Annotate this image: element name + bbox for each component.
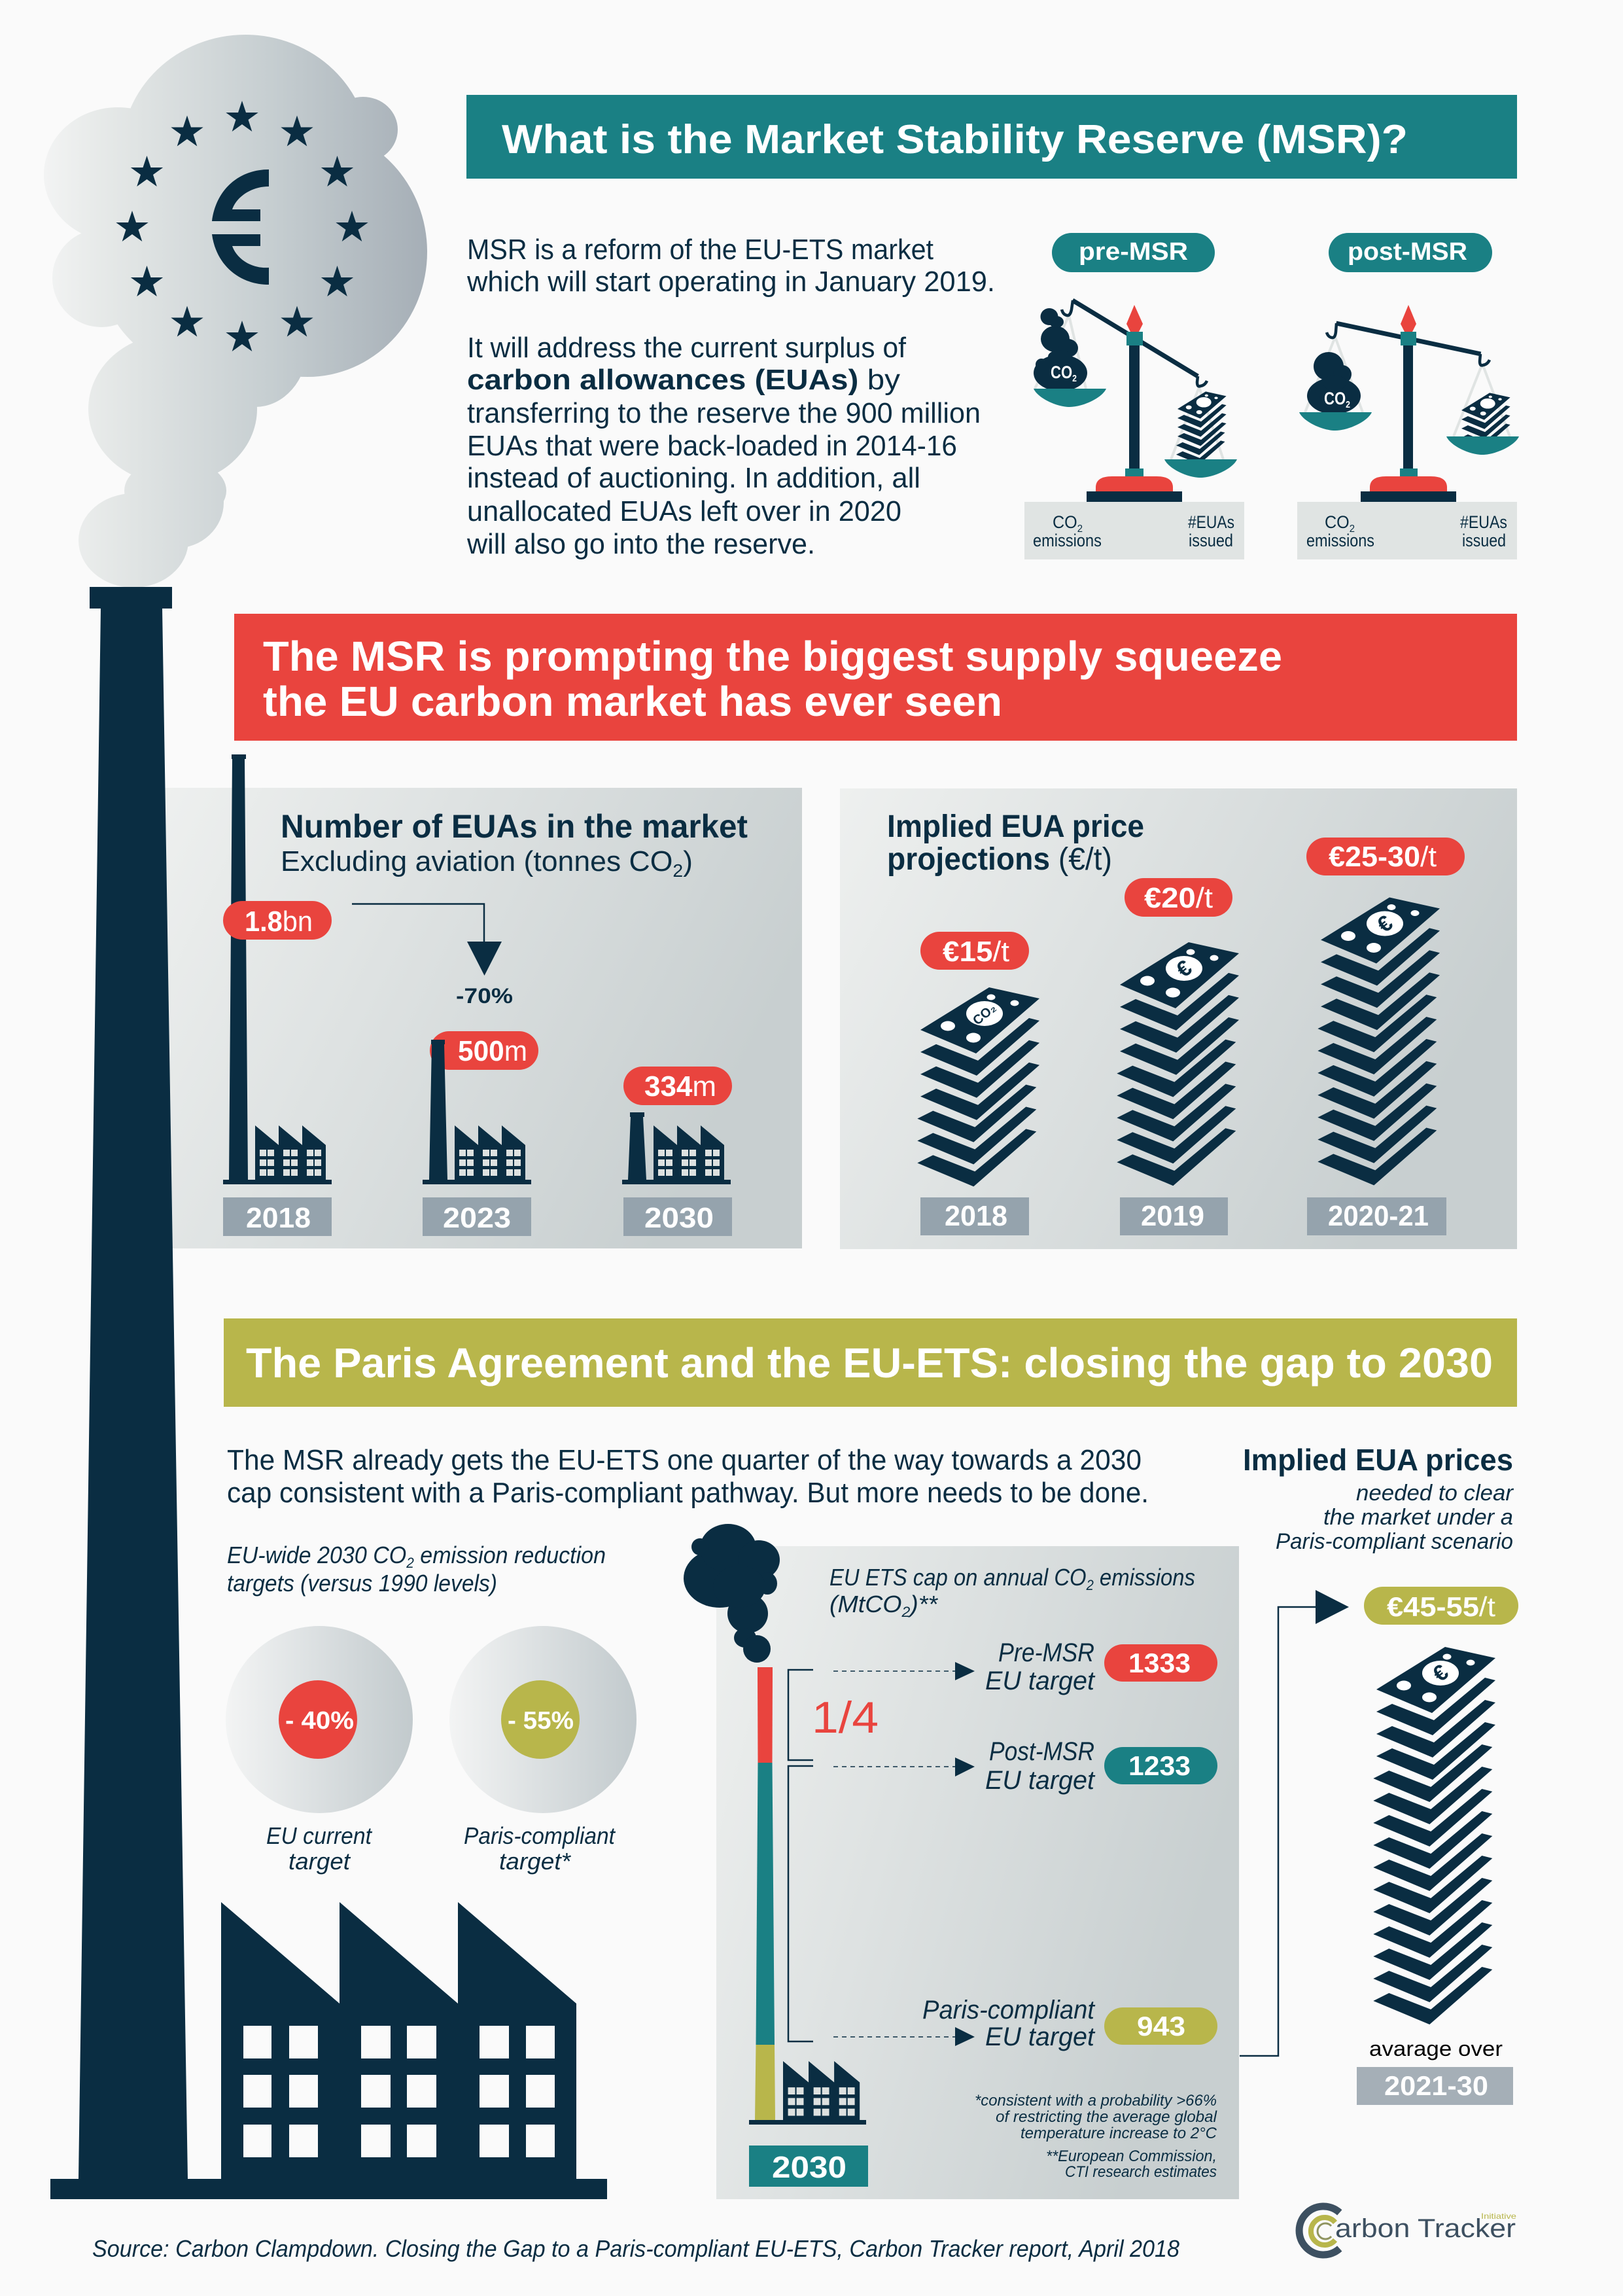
- text block: emission reduction targets: emission reduction: [414, 1542, 606, 1568]
- text block: implied EUA prices: needed to clear: [1356, 1481, 1514, 1506]
- title banner: what is the MSR: [466, 95, 1517, 179]
- main chimney and factory: [50, 587, 607, 2199]
- icon: post-MSR balance scale: 2: [1346, 399, 1350, 410]
- label: post-MSR target: [985, 1737, 1096, 1795]
- chart: Paris-compliant target 55 percent: Paris-compliant: [464, 1822, 616, 1849]
- panel subheading: excluding aviation: Excluding aviation (tonnes CO: [281, 845, 668, 877]
- footnotes: of restricting the average global: [996, 2108, 1217, 2126]
- bracket: post MSR to Paris: [788, 1766, 813, 2041]
- year label: 2018: [920, 1197, 1029, 1235]
- pill: pre-MSR: [1052, 233, 1215, 272]
- chart: EU current target 40 percent: - 40%: [285, 1707, 354, 1735]
- title banner: what is the MSR: What is the Market Stability Reserve (MSR)?: [502, 117, 1408, 162]
- text block: MSR explanation: unallocated EUAs left over in 2020: [467, 495, 901, 527]
- year label: 2018: 2018: [945, 1200, 1007, 1232]
- panel: EU ETS cap chart: [684, 1524, 1239, 2199]
- icon: pre-MSR balance scale: [1024, 300, 1244, 559]
- icon: post-MSR balance scale: issued: [1462, 531, 1506, 550]
- text block: MSR explanation: [466, 234, 995, 560]
- logo: Carbon Tracker: arbon Tracker: [1335, 2214, 1516, 2243]
- year label: 2030: [749, 2146, 868, 2187]
- text block: MSR explanation: carbon allowances (EUAs) by: [467, 364, 900, 396]
- icon: banknote stack 2018: CO₂: [970, 1000, 999, 1028]
- pill: 334m: 334m: [644, 1070, 716, 1103]
- icon: banknote stack 2021-30: €: [1428, 1659, 1453, 1687]
- arrow: to implied price: [1240, 1590, 1349, 2056]
- chart heading: EU ETS cap: (MtCO: [829, 1591, 899, 1617]
- year label: 2019: 2019: [1141, 1200, 1204, 1232]
- smoke cloud with EU stars: [44, 35, 427, 588]
- pill: 45-55 euro per tonne: €45-55/t: [1387, 1591, 1495, 1622]
- label: average over: avarage over: [1369, 2037, 1503, 2060]
- icon: pre-MSR balance scale: 2: [1077, 523, 1083, 535]
- logo: Carbon Tracker: [1299, 2206, 1516, 2255]
- text block: emission reduction targets: EU-wide 2030 CO: [227, 1542, 417, 1568]
- pill: 25-30 euro per tonne: [1306, 838, 1465, 875]
- panel: number of EUAs in the market: [160, 754, 802, 1248]
- icon: ring of stars: [116, 101, 368, 351]
- year label: 2019: [1120, 1197, 1228, 1235]
- banner: Paris Agreement and EU-ETS: The Paris Agreement and the EU-ETS: closing the gap to 2030: [246, 1339, 1493, 1386]
- chart: Paris-compliant target 55 percent: target*: [499, 1848, 571, 1875]
- pill: 45-55 euro per tonne: [1364, 1587, 1518, 1625]
- label: one quarter: 1/4: [812, 1693, 879, 1742]
- pill: 1333: 1333: [1128, 1648, 1191, 1678]
- banner: biggest supply squeeze: [234, 614, 1517, 741]
- icon: post-MSR balance scale: CO: [1325, 512, 1352, 532]
- chart: EU current target 40 percent: EU current: [266, 1822, 373, 1849]
- bar: 2023 chimney and factory: [423, 1040, 531, 1184]
- year label: 2023: [423, 1197, 531, 1236]
- pill: 500m: 500m: [458, 1035, 527, 1067]
- pill: 15 euro per tonne: [920, 932, 1029, 970]
- banner: Paris Agreement and EU-ETS: [224, 1318, 1517, 1407]
- text block: emission reduction targets: [227, 1542, 606, 1597]
- pill: 1.8bn: 1.8bn: [245, 906, 313, 938]
- icon: pre-MSR balance scale: CO: [1053, 512, 1079, 532]
- icon: euro sign: [212, 169, 269, 285]
- pill: 1333: [1104, 1644, 1217, 1682]
- year label: 2020-21: [1307, 1197, 1446, 1235]
- chart heading: EU ETS cap: 2: [901, 1604, 910, 1620]
- text block: MSR explanation: MSR is a reform of the EU-ETS market: [467, 234, 934, 266]
- pill: 334m: [623, 1067, 732, 1105]
- icon: banknote stack 2021-30: [1373, 1647, 1495, 2024]
- icon: post-MSR balance scale: [1297, 305, 1519, 559]
- text block: implied EUA prices: [1243, 1443, 1514, 1554]
- banner: biggest supply squeeze: The MSR is prompting the biggest supply squeeze: [263, 633, 1282, 680]
- footnotes: CTI research estimates: [1065, 2163, 1217, 2181]
- pill: 1.8bn: [223, 901, 332, 940]
- text block: implied EUA prices: Implied EUA prices: [1243, 1443, 1513, 1477]
- text block: MSR explanation: transferring to the reserve the 900 million: [467, 397, 981, 429]
- label: post-MSR target: Post-MSR: [989, 1737, 1094, 1766]
- year label: 2018: [223, 1197, 332, 1236]
- footnotes: [975, 2092, 1217, 2181]
- bracket: pre to post MSR: [788, 1670, 813, 1760]
- year label: 2030: 2030: [772, 2150, 846, 2184]
- icon: dark smoke: [684, 1524, 780, 1663]
- chart: Paris-compliant target 55 percent: - 55%: [508, 1707, 574, 1735]
- year label: 2018: 2018: [246, 1202, 311, 1234]
- year label: 2023: 2023: [443, 1202, 511, 1234]
- chart: EU current target 40 percent: target: [288, 1848, 351, 1875]
- banner: biggest supply squeeze: the EU carbon market has ever seen: [263, 678, 1002, 725]
- text block: one quarter of the way: [227, 1444, 1149, 1509]
- arrow: pre-MSR: [833, 1662, 975, 1680]
- text block: implied EUA prices: Paris-compliant scenario: [1276, 1529, 1513, 1554]
- footnotes: *consistent with a probability >66%: [975, 2092, 1217, 2110]
- icon: post-MSR balance scale: CO: [1324, 389, 1350, 408]
- arrow: minus 70 percent: [352, 904, 502, 976]
- text block: emission reduction targets: 2: [406, 1555, 414, 1571]
- icon: post-MSR balance scale: #EUAs: [1460, 512, 1507, 532]
- label: pre-MSR target: EU target: [985, 1667, 1096, 1695]
- year label: 2030: 2030: [644, 1202, 714, 1234]
- label: pre-MSR target: [985, 1638, 1096, 1695]
- chart: Paris-compliant target 55 percent: [449, 1626, 637, 1875]
- chart heading: EU ETS cap: )**: [907, 1591, 938, 1617]
- chart heading: EU ETS cap: 2: [1086, 1577, 1094, 1593]
- text block: one quarter of the way: cap consistent with a Paris-compliant pathway. But more needs to be done.: [227, 1477, 1149, 1509]
- text block: emission reduction targets: targets (versus 1990 levels): [227, 1570, 497, 1597]
- pill: 943: 943: [1137, 2011, 1185, 2041]
- icon: banknote stack 2019: €: [1172, 955, 1196, 983]
- pill: 25-30 euro per tonne: €25-30/t: [1329, 841, 1437, 873]
- label: Paris-compliant target: [922, 1996, 1096, 2051]
- icon: post-MSR balance scale: emissions: [1306, 531, 1374, 550]
- text block: implied EUA prices: the market under a: [1323, 1505, 1513, 1530]
- pill: 15 euro per tonne: €15/t: [943, 936, 1009, 968]
- text block: one quarter of the way: The MSR already gets the EU-ETS one quarter of the way towards a 2030: [227, 1444, 1142, 1476]
- panel heading: implied EUA price: Implied EUA price: [887, 809, 1144, 844]
- pill: 500m: [430, 1031, 538, 1070]
- pill: 20 euro per tonne: [1125, 878, 1232, 917]
- year label: 2021-30: [1357, 2067, 1513, 2105]
- icon: pre-MSR balance scale: emissions: [1033, 531, 1102, 550]
- label: Paris-compliant target: EU target: [985, 2022, 1096, 2051]
- chart heading: EU ETS cap: EU ETS cap on annual CO: [829, 1564, 1111, 1591]
- pill: 943: [1104, 2007, 1217, 2045]
- chart heading: EU ETS cap: [829, 1564, 1195, 1620]
- panel subheading: excluding aviation: ): [683, 845, 693, 877]
- icon: banknote stack 2019: [1117, 942, 1239, 1186]
- label: Paris-compliant target: Paris-compliant: [922, 1996, 1096, 2024]
- logo: Carbon Tracker: Initiative: [1481, 2212, 1516, 2221]
- year label: 2021-30: 2021-30: [1384, 2070, 1488, 2101]
- text block: MSR explanation: will also go into the reserve.: [466, 528, 815, 560]
- arrow: post-MSR: [833, 1757, 975, 1776]
- label: -70%: -70%: [456, 984, 513, 1008]
- year label: 2030: [623, 1197, 732, 1236]
- panel heading: number of EUAs: Number of EUAs in the market: [281, 808, 748, 845]
- pill: 1233: 1233: [1128, 1750, 1191, 1781]
- label: pre-MSR target: Pre-MSR: [998, 1638, 1094, 1667]
- arrow: Paris-compliant: [833, 2027, 975, 2046]
- label: post-MSR target: EU target: [985, 1766, 1096, 1795]
- pill: pre-MSR: pre-MSR: [1079, 238, 1188, 266]
- icon: banknote stack 2020-21: [1318, 898, 1440, 1186]
- text block: MSR explanation: which will start operating in January 2019.: [466, 266, 995, 298]
- icon: pre-MSR balance scale: CO: [1051, 362, 1077, 382]
- icon: banknote stack 2020-21: €: [1372, 910, 1397, 938]
- chart: EU current target 40 percent: [226, 1626, 413, 1875]
- icon: pre-MSR balance scale: #EUAs: [1188, 512, 1234, 532]
- icon: pre-MSR balance scale: 2: [1072, 373, 1077, 384]
- footnotes: temperature increase to 2°C: [1021, 2125, 1217, 2142]
- chart heading: EU ETS cap: emissions: [1094, 1564, 1195, 1591]
- panel: implied EUA price projections: [840, 788, 1517, 1249]
- pill: post-MSR: post-MSR: [1348, 238, 1467, 266]
- chart: segmented chimney: [749, 1667, 866, 2125]
- panel heading line 2: projections: projections (€/t): [887, 842, 1112, 877]
- pill: 1233: [1104, 1747, 1217, 1784]
- icon: banknote stack 2018: [917, 987, 1039, 1186]
- panel subheading: excluding aviation: 2: [672, 860, 683, 881]
- bar: 2030 chimney and factory: [622, 1112, 731, 1184]
- bar: 2018 chimney and factory: [223, 754, 332, 1184]
- text block: MSR explanation: instead of auctioning. In addition, all: [467, 462, 920, 494]
- text block: MSR explanation: EUAs that were back-loaded in 2014-16: [467, 430, 957, 462]
- icon: pre-MSR balance scale: issued: [1189, 531, 1233, 550]
- pill: post-MSR: [1329, 233, 1492, 272]
- pill: 20 euro per tonne: €20/t: [1144, 882, 1213, 914]
- source line: Source: Carbon Clampdown. Closing the Gap to a Paris-compliant EU-ETS, Carbon Tracker report, April 2018: [92, 2235, 1179, 2262]
- footnotes: **European Commission,: [1046, 2147, 1217, 2165]
- year label: 2020-21: 2020-21: [1328, 1200, 1429, 1232]
- icon: post-MSR balance scale: 2: [1350, 523, 1355, 535]
- text block: MSR explanation: It will address the current surplus of: [467, 332, 907, 364]
